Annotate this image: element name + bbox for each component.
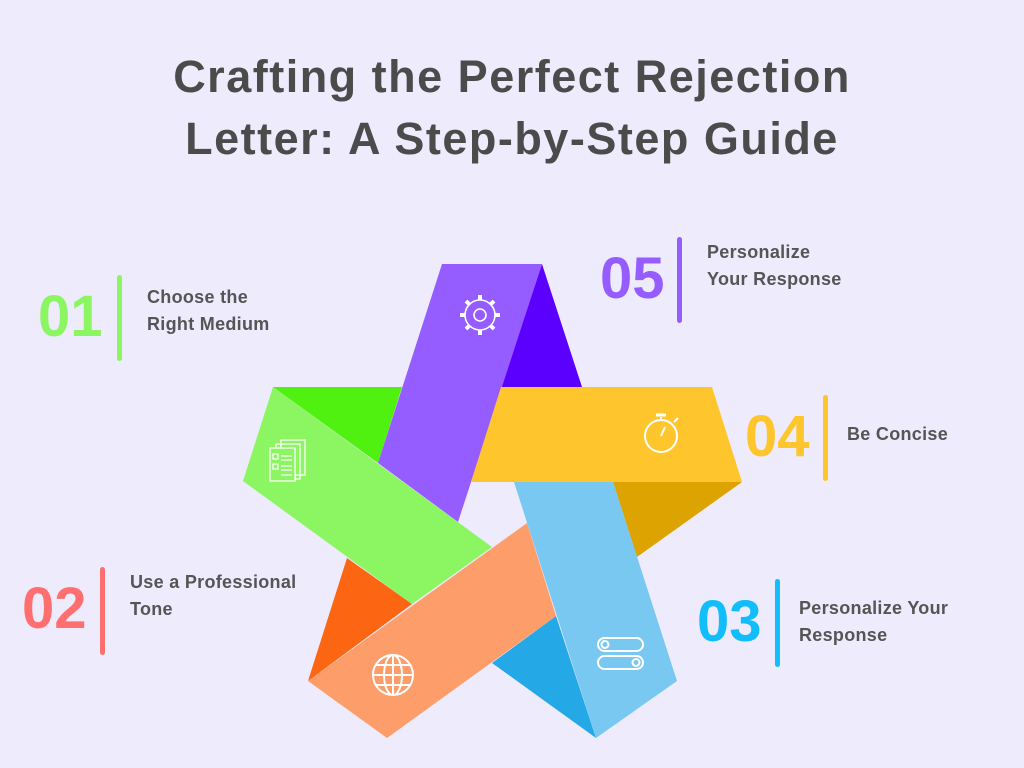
step 01: Right Medium (147, 314, 270, 334)
band: orange (308, 523, 556, 738)
step 01 (38, 275, 270, 361)
title: Crafting the Perfect Rejection (173, 51, 851, 102)
band: blue (514, 482, 677, 738)
step 05: 05 (600, 246, 665, 311)
title: Letter: A Step-by-Step Guide (185, 113, 839, 164)
step 02: Tone (130, 599, 173, 619)
step 04 (745, 395, 948, 481)
icon: gear (460, 295, 500, 335)
step 01: 01 (38, 284, 103, 349)
icon: globe (373, 655, 413, 695)
step 03 (697, 579, 948, 667)
icon: documents (270, 440, 305, 481)
icon: toggles (598, 638, 643, 669)
band: yellow (471, 387, 742, 482)
step 02: 02 (22, 576, 87, 641)
step 02: Use a Professional (130, 572, 296, 592)
band: purple (378, 264, 542, 522)
step 01: Choose the (147, 287, 248, 307)
step 03: Personalize Your (799, 598, 948, 618)
title (173, 51, 851, 164)
step 03: Response (799, 625, 887, 645)
step 04: 04 (745, 404, 810, 469)
step 05 (600, 237, 842, 323)
step 04: Be Concise (847, 424, 948, 444)
step 03: 03 (697, 589, 762, 654)
icon: stopwatch (645, 415, 678, 452)
step 05: Personalize (707, 242, 810, 262)
step 02 (22, 567, 296, 655)
band: green (243, 387, 492, 604)
step 05: Your Response (707, 269, 842, 289)
